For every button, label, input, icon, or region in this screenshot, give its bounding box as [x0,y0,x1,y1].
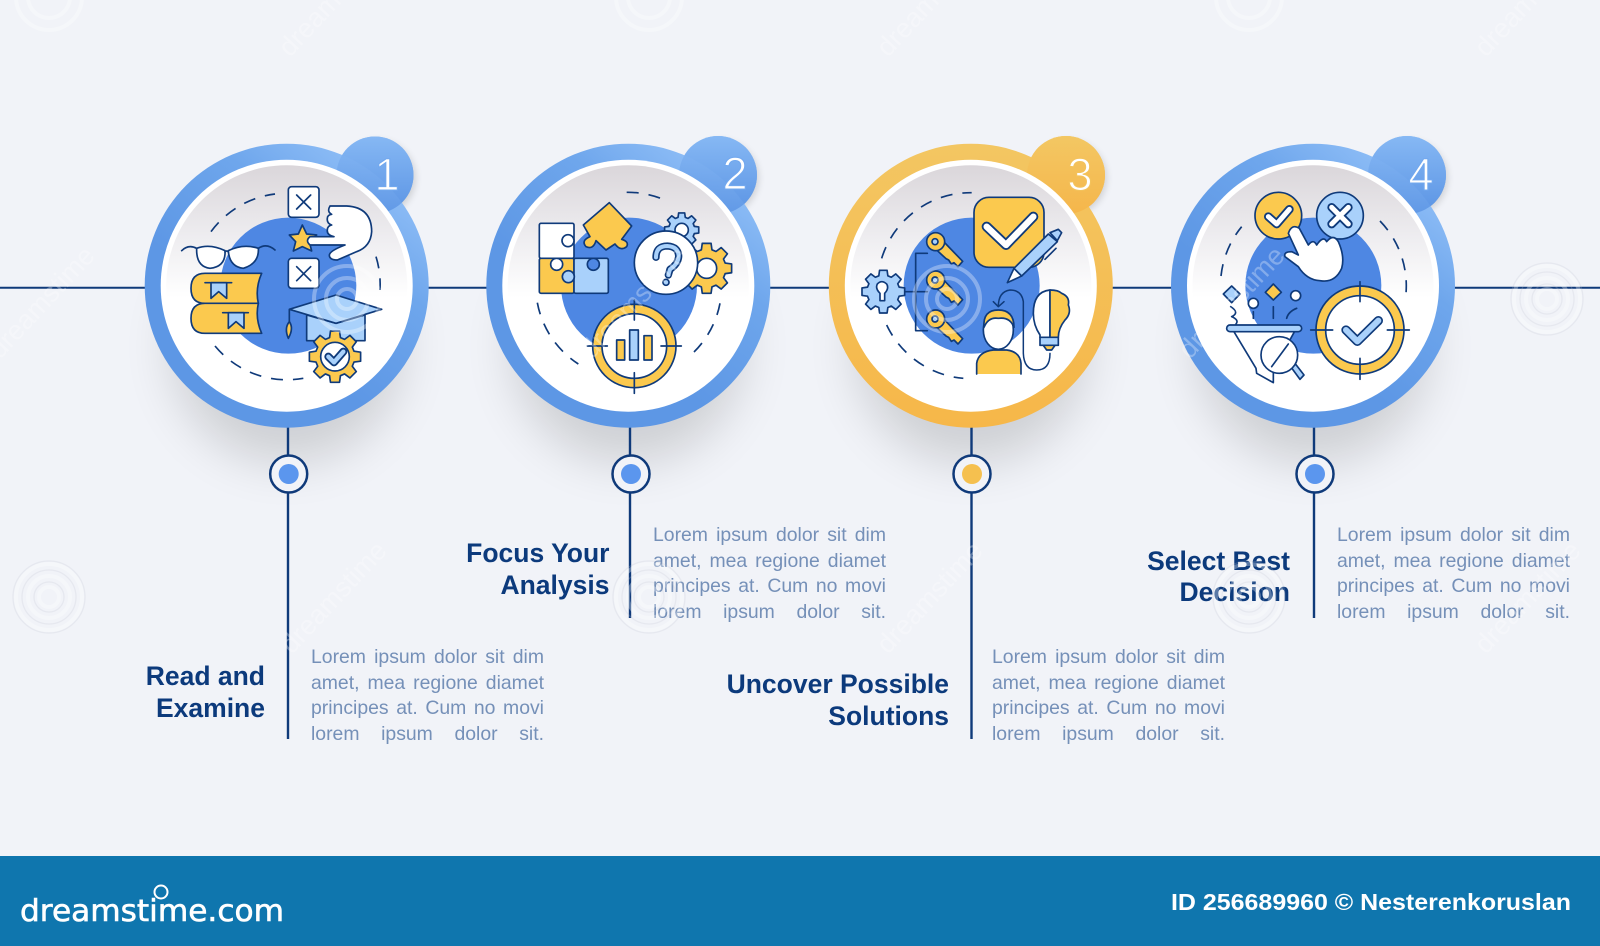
icon: pointing hand [1285,227,1343,281]
watermark text: dreamstime [870,535,989,659]
text block: step 1: Lorem ipsum dolor sit dim [311,646,544,668]
panel: step 1 [145,136,429,739]
icon: checked box and pen [974,197,1062,283]
watermark text: dreamstime [274,535,393,659]
panel: step 4 [1147,136,1455,618]
circle shadow [855,231,1087,463]
number badge 4: 4 [1408,149,1434,200]
watermark text: dreamstime [1172,240,1291,364]
text block: step 3: amet, mea regione diamet [992,672,1225,694]
icon: graduation cap and gear [286,295,382,382]
icon: rejected option boxes [288,187,319,288]
icon group: focus your analysis [537,192,732,393]
stem line and node [612,420,650,618]
icon group: read and examine [182,187,382,382]
icon: glasses [182,246,275,268]
number badge 1 [145,136,429,428]
text block: step 2: Lorem ipsum dolor sit dim [653,524,886,546]
stem line and node [954,420,990,739]
heading: Focus Your [466,538,610,568]
stem line and node [1296,420,1334,618]
icon: star and pointing hand [289,206,372,260]
watermark text: dreamstime [1468,535,1587,659]
text block: step 1: lorem ipsum dolor sit. [311,723,544,745]
icon: person, arrow and bulb [977,290,1069,374]
panel: step 2 [466,136,770,618]
heading: Select Best [1147,546,1290,576]
icon: target with bar chart [587,300,681,393]
heading: Examine [156,693,265,723]
text block: step 1 [311,646,544,745]
number badge 1: 1 [374,149,400,200]
text block: step 3 [992,646,1225,745]
circle shadow [1197,231,1429,463]
icon: puzzle pieces [539,203,632,293]
text block: step 2: amet, mea regione diamet [653,550,886,572]
watermark text [0,0,1587,659]
heading: Decision [1180,577,1290,607]
heading: Solutions [828,701,949,731]
number badge 3 [829,136,1113,428]
number badge 3: 3 [1067,149,1093,200]
text block: step 2: principes at. Cum no movi [653,575,886,597]
text block: step 4: principes at. Cum no movi [1337,575,1570,597]
text block: step 3: lorem ipsum dolor sit. [992,723,1225,745]
circle shadow [512,231,744,463]
icon: books [191,273,262,333]
icon: gears and question [634,213,732,294]
icon: target with check [1311,282,1409,379]
footer logo: dreamstime.com [20,894,284,929]
heading: Uncover Possible [727,669,949,699]
icon: filter funnel with magnifier [1223,284,1304,383]
icon group: select best decision [1221,192,1409,383]
watermark text: dreamstime [574,240,693,364]
panel: step 3 [727,136,1113,739]
stem line and node [270,420,307,739]
text block: step 1: principes at. Cum no movi [311,697,544,719]
text block: step 3: principes at. Cum no movi [992,697,1225,719]
icon: keys [927,233,963,344]
icon: key bracket and gear [862,253,927,331]
text block: step 4: lorem ipsum dolor sit. [1337,601,1570,623]
footer credit: ID 256689960 © Nesterenkoruslan [1171,889,1571,915]
circle shadow [171,231,403,463]
footer banner [0,856,1600,946]
watermark overlay [13,0,1583,633]
text block: step 3: Lorem ipsum dolor sit dim [992,646,1225,668]
timeline connector line [0,287,1600,289]
number badge 4 [1171,136,1455,428]
number badge 2: 2 [722,148,748,199]
heading: Read and [146,661,265,691]
text block: step 1: amet, mea regione diamet [311,672,544,694]
text block: step 2 [653,524,886,623]
number badge 2 [486,136,770,428]
icon: accept and reject buttons [1255,192,1363,239]
text block: step 4 [1337,524,1570,623]
icon group: uncover possible solutions [862,193,1069,378]
text block: step 4: amet, mea regione diamet [1337,550,1570,572]
text block: step 2: lorem ipsum dolor sit. [653,601,886,623]
text block: step 4: Lorem ipsum dolor sit dim [1337,524,1570,546]
heading: Analysis [500,570,610,600]
